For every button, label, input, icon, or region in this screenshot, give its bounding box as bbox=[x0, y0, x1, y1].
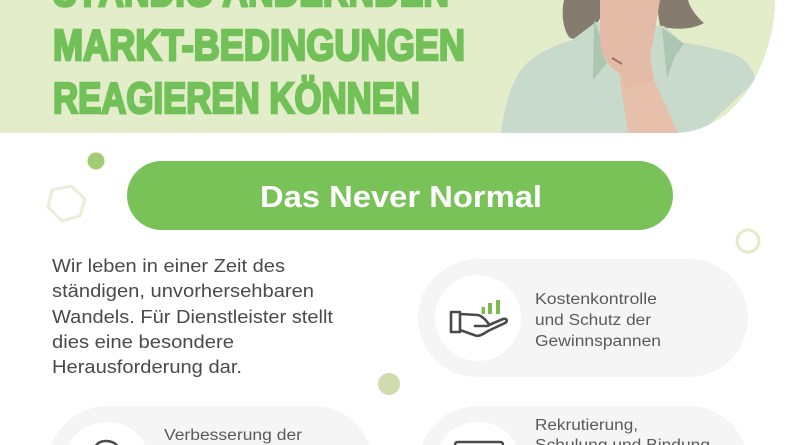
fist and chin bbox=[600, 0, 660, 88]
panel: cost control: Gewinnspannen bbox=[535, 333, 661, 350]
forearm bbox=[620, 80, 678, 133]
card text: Rekrutierung, bbox=[535, 417, 638, 434]
title: REAGIEREN KÖNNEN bbox=[53, 74, 420, 123]
collars bbox=[593, 20, 684, 80]
panel: improvement bbox=[52, 406, 370, 445]
intro text block bbox=[52, 255, 333, 377]
card text: Verbesserung der bbox=[164, 427, 302, 444]
icon: outlined shape bbox=[95, 441, 118, 445]
decorative ring bbox=[737, 230, 759, 252]
icon: hand with bars bbox=[451, 300, 507, 336]
intro text block: ständigen, unvorhersehbaren bbox=[52, 280, 314, 301]
panel: cost control bbox=[418, 259, 748, 377]
intro text block: Herausforderung dar. bbox=[52, 356, 242, 377]
icon: screen bbox=[455, 442, 503, 445]
title: MARKT-BEDINGUNGEN bbox=[53, 21, 465, 70]
card text: Kostenkontrolle bbox=[535, 291, 657, 308]
intro text block: Wandels. Für Dienstleister stellt bbox=[52, 306, 333, 327]
fist shadow bbox=[612, 58, 622, 64]
intro text block: dies eine besondere bbox=[52, 331, 234, 352]
decorative dot bbox=[88, 152, 104, 170]
intro text block: Wir leben in einer Zeit des bbox=[52, 255, 285, 276]
hair bbox=[563, 0, 704, 39]
photo: thinking woman bbox=[501, 0, 756, 133]
decorative dot bbox=[378, 373, 400, 395]
title bbox=[53, 0, 465, 123]
decorative hexagon bbox=[48, 186, 85, 221]
heading pill bbox=[127, 161, 673, 230]
panel: recruiting bbox=[422, 406, 744, 445]
panel: cost control: und Schutz der bbox=[535, 312, 651, 329]
heading pill: Das Never Normal bbox=[260, 179, 542, 214]
shirt bbox=[501, 22, 756, 133]
header banner bbox=[0, 0, 775, 133]
